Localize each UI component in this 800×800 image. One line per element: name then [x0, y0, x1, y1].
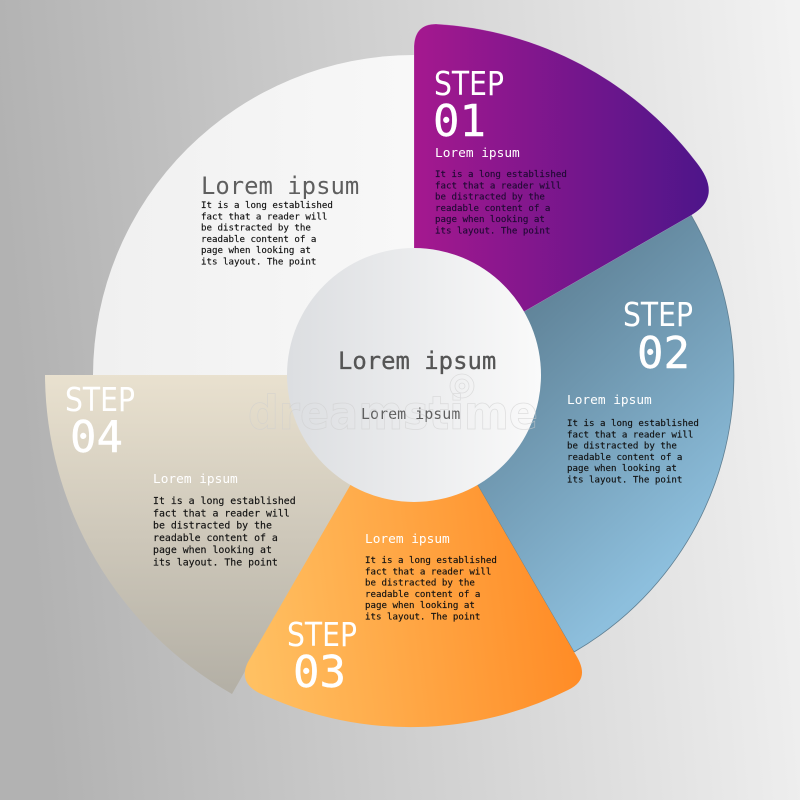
step 03 label: STEP [287, 615, 357, 654]
step 02 text block: page when looking at [567, 464, 677, 474]
text block: white segment: fact that a reader will [201, 212, 327, 222]
step 04 text block: its layout. The point [153, 558, 278, 568]
step 04 text block: fact that a reader will [153, 508, 290, 519]
step 02 text block: It is a long established [567, 419, 699, 429]
step 04 label: STEP [65, 380, 135, 419]
step 01 heading: Lorem ipsum [435, 146, 520, 161]
heading: white segment: Lorem ipsum [201, 172, 359, 200]
step 03 text block: It is a long established [365, 556, 497, 566]
step 03 text block: its layout. The point [365, 612, 480, 622]
panel: step 01 [414, 24, 709, 375]
step 02 number: 02 [637, 328, 690, 379]
text block: white segment: be distracted by the [201, 224, 311, 234]
panel: step 02 [414, 215, 734, 652]
step 02 label: STEP [623, 295, 693, 334]
centre subheading: Lorem ipsum [361, 405, 460, 423]
step 01 number: 01 [433, 96, 486, 147]
step 02 text block: readable content of a [567, 453, 682, 463]
step 03 number: 03 [293, 647, 346, 698]
watermark: dreamstime [248, 386, 538, 440]
text block: white segment: readable content of a [201, 235, 316, 245]
text block: white segment: It is a long established [201, 201, 333, 211]
step 03 text block: readable content of a [365, 590, 480, 600]
text block: white segment: page when looking at [201, 246, 311, 256]
step 03 heading: Lorem ipsum [365, 532, 450, 547]
step 03 text block: page when looking at [365, 601, 475, 611]
step 02 heading: Lorem ipsum [567, 393, 652, 408]
watermark spiral [450, 374, 474, 398]
step 03 text block: fact that a reader will [365, 567, 491, 577]
centre heading: Lorem ipsum [338, 347, 496, 375]
step 01 text block: readable content of a [435, 204, 550, 214]
step 04 text block: It is a long established [153, 496, 296, 507]
step 04 text block: be distracted by the [153, 521, 272, 532]
step 02 text block: its layout. The point [567, 476, 682, 486]
step 01 label: STEP [434, 64, 504, 103]
step 01 text block: fact that a reader will [435, 181, 561, 191]
step 04 heading: Lorem ipsum [153, 472, 238, 487]
step 02 text block: fact that a reader will [567, 430, 693, 440]
step 04 number: 04 [70, 412, 123, 463]
text block: white segment: its layout. The point [201, 258, 316, 268]
step 01 text block: be distracted by the [435, 193, 545, 203]
panel: centre-left white segment [93, 55, 414, 375]
step 04 text block: readable content of a [153, 533, 278, 544]
step 01 text block: page when looking at [435, 215, 545, 225]
step 04 text block: page when looking at [153, 545, 272, 556]
panel: step 04 [45, 375, 414, 694]
step 01 text block: It is a long established [435, 170, 567, 180]
panel: step 03 [245, 375, 582, 727]
centre circle [287, 248, 541, 502]
step 02 text block: be distracted by the [567, 442, 677, 452]
step 01 text block: its layout. The point [435, 226, 550, 236]
step 03 text block: be distracted by the [365, 579, 475, 589]
